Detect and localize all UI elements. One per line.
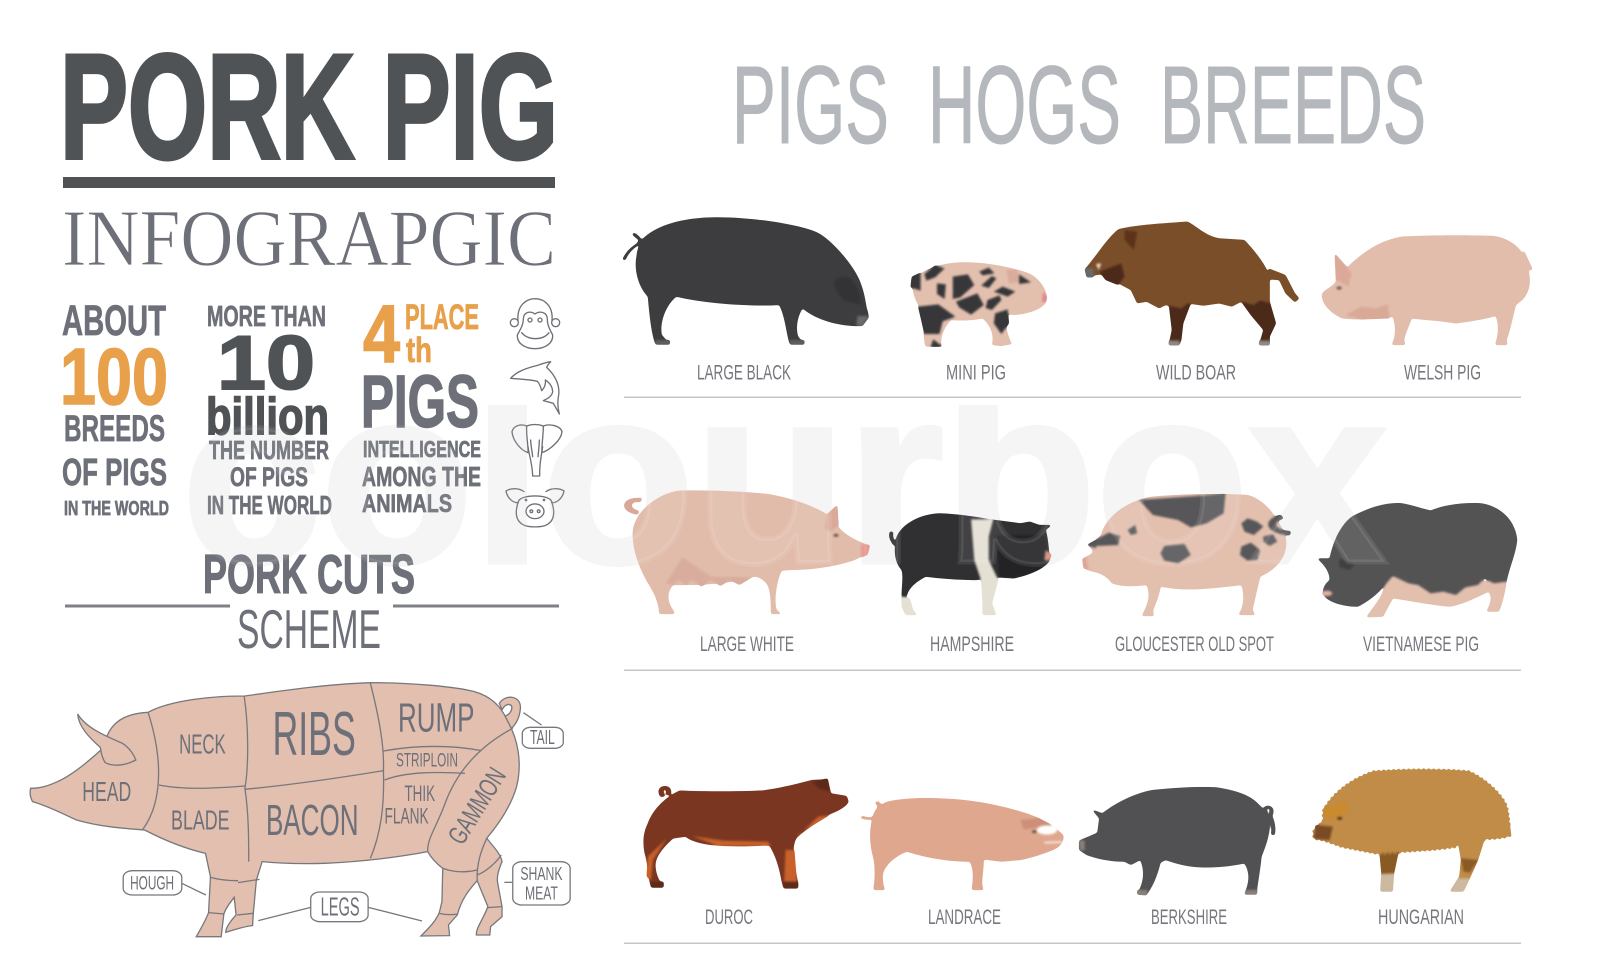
illustration: hungarian pig	[1314, 770, 1511, 892]
row divider 1	[624, 396, 1521, 398]
stat: about 100 breeds: IN THE WORLD	[64, 498, 169, 520]
callout: tail	[522, 713, 563, 749]
label: hampshire: HAMPSHIRE	[930, 633, 1014, 656]
breed: landrace	[861, 798, 1063, 929]
stat: pigs 4th place intelligence: th	[406, 331, 432, 370]
breed: welsh pig	[1322, 235, 1533, 384]
heading rules	[65, 604, 559, 608]
stat: 10 billion pigs: OF PIGS	[230, 462, 308, 492]
heading: pork cuts: PORK CUTS	[203, 543, 415, 605]
callout: shank meat: MEAT	[525, 884, 558, 904]
stat: about 100 breeds: 100	[60, 332, 168, 421]
pig body outline	[30, 683, 519, 937]
breed: duroc	[644, 778, 849, 929]
heading: scheme: SCHEME	[237, 598, 381, 660]
label: vietnamese pig: VIETNAMESE PIG	[1363, 633, 1479, 656]
illustration: vietnamese pig	[1317, 503, 1517, 617]
stat: pigs 4th place intelligence: 4	[363, 289, 400, 380]
illustration: landrace pig	[861, 798, 1063, 890]
breed: mini pig	[910, 262, 1047, 384]
illustration: hampshire pig	[891, 513, 1052, 615]
heading: pigs hogs breeds: PIGS	[732, 44, 889, 167]
stat: about 100 breeds: OF PIGS	[62, 452, 167, 494]
icon: dolphin	[511, 362, 559, 414]
cut labels: FLANK	[385, 805, 429, 829]
callout: shank meat: SHANK	[520, 864, 563, 885]
illustration: large white pig	[628, 491, 870, 614]
label: berkshire: BERKSHIRE	[1151, 906, 1227, 929]
breed: hungarian	[1314, 770, 1511, 929]
pig tail	[499, 697, 520, 729]
breed: berkshire	[1079, 787, 1273, 929]
stat: pigs 4th place intelligence: PIGS	[361, 360, 479, 443]
stat: pigs 4th place intelligence: AMONG THE	[362, 461, 481, 492]
label: hungarian: HUNGARIAN	[1378, 906, 1464, 929]
icon: pig face	[506, 489, 564, 527]
cut labels: BACON	[266, 796, 359, 844]
stat: pigs 4th place intelligence: INTELLIGENCE	[363, 436, 481, 462]
row divider 2	[624, 670, 1521, 671]
stat: about 100 breeds	[60, 297, 169, 520]
title underline bar	[63, 177, 555, 188]
illustration: duroc pig	[644, 778, 849, 888]
pig ear	[78, 714, 136, 765]
watermark overlay: colourbox	[182, 336, 1387, 615]
diagram: pork cuts pig	[30, 683, 570, 937]
callout: tail: TAIL	[530, 726, 555, 749]
stat: 10 billion pigs: 10	[217, 321, 315, 406]
callout: legs	[258, 892, 422, 922]
stat: pigs 4th place intelligence: PLACE	[405, 298, 479, 337]
callout: shank meat	[504, 862, 570, 905]
stat: about 100 breeds: ABOUT	[62, 297, 166, 345]
breed: large black	[624, 217, 869, 384]
stat: 10 billion pigs	[206, 301, 332, 520]
cut labels: THIK	[404, 782, 435, 807]
label: welsh pig: WELSH PIG	[1404, 362, 1481, 384]
illustration: wild boar	[1085, 222, 1299, 345]
illustration: berkshire pig	[1079, 787, 1273, 895]
icon: monkey	[510, 299, 560, 349]
cut labels: BLADE	[171, 805, 230, 836]
stat: about 100 breeds: BREEDS	[64, 408, 165, 449]
heading: pigs hogs breeds: HOGS	[928, 44, 1121, 167]
illustration: gloucester old spot pig	[1082, 494, 1291, 616]
title: pork pig: PORK PIG	[60, 23, 558, 190]
cut lines	[142, 683, 513, 915]
watermark: colourbox	[182, 336, 1387, 615]
heading: pigs hogs breeds	[732, 44, 1426, 167]
label: mini pig: MINI PIG	[946, 362, 1006, 384]
stat: 10 billion pigs: billion	[206, 388, 329, 446]
icon: elephant	[512, 424, 562, 476]
breed: gloucester old spot	[1082, 494, 1291, 656]
stat: 10 billion pigs: MORE THAN	[207, 301, 326, 333]
cut labels: HEAD	[82, 777, 131, 807]
cut labels	[82, 695, 512, 850]
label: large white: LARGE WHITE	[700, 633, 794, 656]
cut labels: RIBS	[272, 700, 356, 769]
cut labels: GAMMON	[442, 762, 512, 850]
stat: 10 billion pigs: IN THE WORLD	[207, 490, 332, 520]
stat: 10 billion pigs: THE NUMBER	[209, 435, 329, 465]
label: wild boar: WILD BOAR	[1156, 362, 1236, 384]
cut labels: RUMP	[398, 695, 474, 741]
icons: smart animals	[506, 299, 564, 527]
label: large black: LARGE BLACK	[697, 362, 791, 384]
heading: pigs hogs breeds: BREEDS	[1160, 44, 1426, 167]
stat: pigs 4th place intelligence	[361, 289, 481, 518]
callout: legs: LEGS	[321, 892, 360, 921]
row divider 3	[624, 942, 1521, 944]
label: gloucester old spot: GLOUCESTER OLD SPOT	[1115, 633, 1274, 656]
callout: hough: HOUGH	[130, 873, 174, 894]
breed: wild boar	[1085, 222, 1299, 384]
illustration: mini pig	[910, 262, 1047, 347]
cut labels: STRIPLOIN	[396, 750, 458, 771]
stat: pigs 4th place intelligence: ANIMALS	[362, 490, 452, 518]
breed: vietnamese pig	[1317, 503, 1517, 656]
illustration: welsh pig	[1322, 235, 1533, 345]
cut labels: NECK	[179, 729, 226, 760]
label: duroc: DUROC	[705, 906, 753, 929]
subtitle: infograpgic: INFOGRAPGIC	[62, 195, 556, 283]
breed: large white	[628, 491, 870, 656]
breed: hampshire	[891, 513, 1052, 656]
illustration: large black pig	[624, 217, 869, 345]
label: landrace: LANDRACE	[928, 906, 1001, 929]
